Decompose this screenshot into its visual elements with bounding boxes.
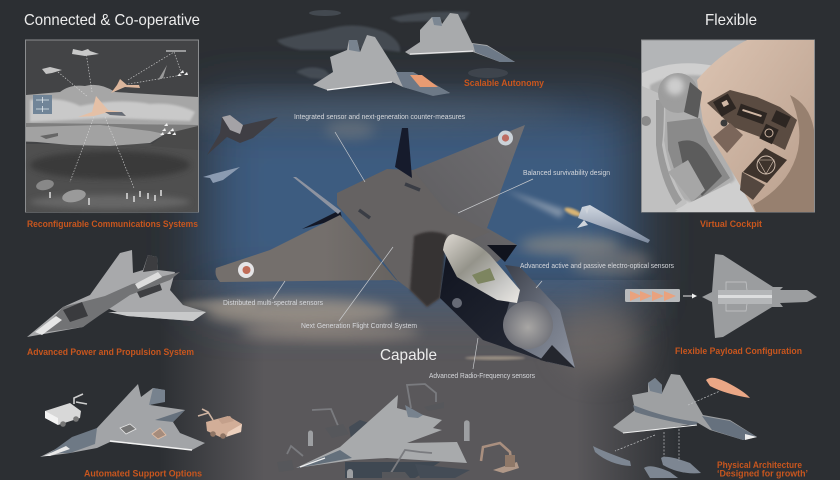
pilot body bbox=[667, 118, 730, 203]
aircraft body bbox=[40, 384, 205, 457]
tanks bbox=[35, 178, 55, 192]
aircraft: flexible payload top view bbox=[702, 254, 817, 338]
right support vehicle bbox=[198, 409, 242, 439]
exploded dashed links bbox=[615, 391, 720, 461]
near side fin shadow bbox=[302, 210, 342, 229]
robot arms bbox=[287, 384, 436, 476]
caption: Scalable Autonomy: Scalable Autonomy bbox=[464, 78, 544, 88]
lower panels bbox=[593, 446, 631, 466]
heading: Connected & Co-operative: Connected & Co-operative bbox=[24, 12, 200, 29]
peach lead aircraft bbox=[78, 96, 126, 117]
ship bbox=[40, 133, 58, 139]
icon: payload module with arrow bbox=[625, 289, 697, 302]
helmet bbox=[658, 73, 698, 113]
workers bbox=[308, 420, 470, 478]
caption: Physical Architecture Designed for growth: ‘Designed for growth’ bbox=[717, 468, 808, 478]
aircraft: automated support options bbox=[40, 384, 242, 457]
rear aircraft bbox=[405, 13, 515, 62]
missile with exhaust plume bbox=[505, 190, 650, 243]
caption: Automated Support Options: Automated Support Options bbox=[84, 468, 202, 478]
under-wing shadow wedge bbox=[487, 245, 517, 262]
left wing bbox=[216, 215, 398, 282]
caption: Physical Architecture Designed for growth bbox=[717, 460, 808, 478]
canopy shell bbox=[642, 63, 755, 212]
lower display screen with hexagon bbox=[743, 148, 787, 183]
belly bbox=[440, 250, 575, 368]
link lines bbox=[58, 52, 182, 188]
peach canopy overlay bbox=[697, 40, 814, 212]
aircraft: power and propulsion cutaway bbox=[27, 250, 206, 337]
label: Integrated sensor: Integrated sensor and next-generation counter-measures bbox=[294, 114, 465, 121]
caption: Virtual Cockpit: Virtual Cockpit bbox=[700, 219, 762, 229]
panel: virtual cockpit image bbox=[641, 40, 814, 212]
drone swarm bbox=[160, 70, 188, 135]
caption: Physical Architecture Designed for growth: Physical Architecture bbox=[717, 460, 802, 470]
main aircraft bbox=[216, 125, 575, 368]
label: electro-optical sensors: Advanced active and passive electro-optical sensors bbox=[520, 263, 674, 270]
aircraft: assembly platform with robot arms bbox=[277, 384, 519, 478]
label: Balanced survivability: Balanced survivability design bbox=[523, 170, 610, 177]
payload icons bbox=[120, 424, 136, 434]
fuselage vents bbox=[359, 184, 420, 218]
clouds band bbox=[26, 85, 198, 125]
label: Radio-Frequency sensors: Advanced Radio-Frequency sensors bbox=[429, 373, 535, 380]
middle display screen bbox=[713, 123, 743, 153]
caption: Reconfigurable Communications Systems: Reconfigurable Communications Systems bbox=[27, 219, 198, 229]
heading: Capable: Capable bbox=[380, 347, 437, 364]
ground bbox=[26, 144, 198, 212]
heading: Flexible: Flexible bbox=[705, 12, 757, 29]
peach robot arm bbox=[481, 443, 519, 473]
caption: Flexible Payload Configuration: Flexible Payload Configuration bbox=[675, 346, 802, 356]
platform bbox=[349, 420, 378, 444]
icon: small ghosted aircraft bbox=[203, 167, 240, 183]
front aircraft bbox=[313, 35, 450, 95]
Scalable Autonomy aircraft group bbox=[277, 10, 515, 96]
left support vehicle bbox=[45, 394, 87, 427]
canopy bbox=[443, 234, 520, 303]
peach upper panel bbox=[706, 378, 750, 398]
upper display screens bbox=[707, 90, 797, 150]
orange highlighted nose bbox=[410, 75, 438, 87]
fuselage upper bbox=[337, 169, 490, 307]
icon: small dark aircraft bbox=[207, 115, 278, 155]
peach second aircraft bbox=[111, 79, 140, 93]
aircraft: physical architecture exploded view bbox=[593, 374, 757, 478]
support aircraft bbox=[72, 49, 99, 56]
panel: reconfigurable communications image bbox=[26, 40, 198, 212]
soldiers bbox=[49, 190, 162, 205]
cockpit floor bbox=[675, 183, 754, 211]
lake bbox=[26, 125, 165, 146]
tail fin bbox=[395, 128, 412, 178]
communications node icon bbox=[33, 95, 52, 114]
spike fin bbox=[293, 177, 341, 214]
cloud shapes bbox=[277, 25, 400, 52]
nose section bbox=[503, 265, 575, 368]
label: Distributed sensors: Distributed multi-spectral sensors bbox=[223, 300, 323, 307]
caption: Advanced Power and Propulsion System: Advanced Power and Propulsion System bbox=[27, 347, 194, 357]
callout lines bbox=[273, 132, 542, 369]
label: Flight Control: Next Generation Flight Control System bbox=[301, 323, 417, 330]
roundels bbox=[238, 262, 254, 278]
intake dome bbox=[503, 301, 553, 349]
aircraft bbox=[296, 395, 467, 468]
right wing bbox=[400, 125, 525, 262]
seat bbox=[642, 86, 687, 212]
